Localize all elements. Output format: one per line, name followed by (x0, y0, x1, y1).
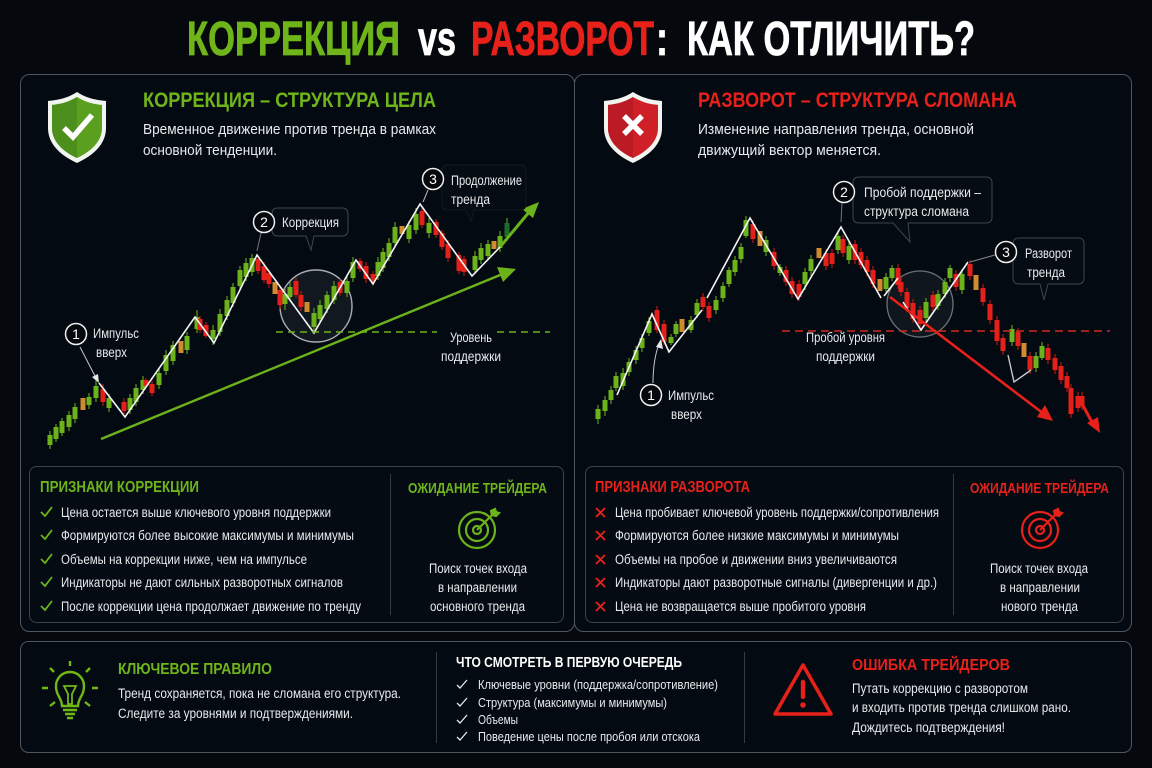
text: what to watch first (456, 655, 718, 744)
icon: red target (1022, 509, 1062, 548)
callout 3: trend continuation: Продолжение (451, 173, 522, 188)
list: correction signs: Формируются более высокие максимумы и минимумы (61, 528, 354, 543)
callout 2: support breakout (834, 177, 992, 242)
box: reversal signs (586, 466, 1124, 622)
callout 1: impulse (66, 324, 139, 383)
chart: trend reversal (598, 177, 1110, 433)
candlesticks (598, 216, 1082, 424)
title: КОРРЕКЦИЯ (187, 13, 400, 66)
text: traders' mistake: Путать коррекцию с разворотом (852, 681, 1028, 696)
callout 2: correction: 2 (260, 214, 268, 230)
list: correction signs (61, 505, 361, 614)
title: vs (418, 13, 456, 66)
text: key rule: Следите за уровнями и подтверждениями. (118, 706, 353, 721)
callout 3: trend reversal: Разворот (1025, 246, 1072, 261)
callout 3: trend reversal (970, 238, 1084, 300)
callout 2: support breakout: 2 (840, 184, 848, 200)
text: trader expectation: Поиск точек входа (990, 561, 1088, 576)
highlight circle (280, 270, 352, 342)
text: what to watch first: Ключевые уровни (поддержка/сопротивление) (478, 678, 718, 692)
heading: trader expectation: ОЖИДАНИЕ ТРЕЙДЕРА (970, 479, 1109, 497)
callout 3: trend reversal: тренда (1027, 265, 1065, 280)
support level dashed line (276, 331, 550, 333)
breakdown label: поддержки (816, 349, 875, 364)
description: correction: основной тенденции. (143, 142, 277, 159)
text: what to watch first: ЧТО СМОТРЕТЬ В ПЕРВУЮ ОЧЕРЕДЬ (456, 655, 682, 671)
arrow: rising trendline (101, 267, 516, 439)
icon: warning triangle (775, 665, 831, 714)
callout 3: trend continuation: тренда (451, 192, 490, 207)
description: correction: Временное движение против тренда в рамках (143, 121, 436, 138)
text: trader expectation (429, 561, 527, 614)
highlight circle (887, 271, 953, 337)
white structure zigzag (99, 204, 502, 417)
title (187, 13, 975, 66)
box: correction signs (30, 466, 564, 622)
chart: uptrend with correction (50, 165, 550, 449)
list cross icons (596, 508, 605, 611)
text: trader expectation: в направлении (438, 580, 517, 595)
callout 1: impulse: 1 (72, 326, 80, 342)
callout 2: support breakout: Пробой поддержки – (864, 185, 981, 200)
callout 1: impulse: Импульс (668, 388, 714, 403)
icon: green target (459, 509, 499, 548)
description: reversal: Изменение направления тренда, основной (698, 121, 974, 138)
list: reversal signs: Цена пробивает ключевой уровень поддержки/сопротивления (615, 505, 939, 520)
text: what to watch first: Структура (максимумы и минимумы) (478, 696, 667, 710)
callout 1: impulse: вверх (671, 407, 702, 422)
candlesticks (50, 208, 507, 449)
description: reversal (698, 121, 974, 159)
text: key rule: Тренд сохраняется, пока не сломана его структура. (118, 686, 401, 701)
icon: light bulb (42, 661, 98, 718)
panel: reversal (574, 74, 1132, 632)
callout 3: trend reversal: 3 (1002, 244, 1010, 260)
text: trader expectation: основного тренда (430, 599, 525, 614)
title: КАК ОТЛИЧИТЬ? (687, 13, 975, 66)
heading: correction: КОРРЕКЦИЯ – СТРУКТУРА ЦЕЛА (143, 89, 436, 112)
arrow: breakdown down (890, 297, 1053, 421)
support level label (441, 330, 501, 364)
panel: bottom summary (20, 642, 1132, 752)
description: reversal: движущий вектор меняется. (698, 142, 881, 159)
callout 2: support breakout: структура сломана (864, 204, 969, 219)
text: key rule: КЛЮЧЕВОЕ ПРАВИЛО (118, 661, 272, 678)
text: traders' mistake: Дождитесь подтверждения! (852, 720, 1005, 735)
callout 2: correction (254, 208, 348, 251)
breakdown label (806, 330, 885, 364)
breakdown label: Пробой уровня (806, 330, 885, 345)
icon: red shield with cross (604, 92, 662, 163)
title: : (656, 13, 668, 66)
heading: correction signs: ПРИЗНАКИ КОРРЕКЦИИ (40, 479, 199, 496)
list: correction signs: Цена остается выше ключевого уровня поддержки (61, 505, 331, 520)
text: what to watch first: Поведение цены после пробоя или отскока (478, 730, 700, 744)
list: reversal signs: Индикаторы дают разворотные сигналы (дивергенции и др.) (615, 575, 937, 590)
callout 3: trend continuation (422, 165, 526, 221)
title: РАЗВОРОТ (471, 13, 654, 66)
text: trader expectation: в направлении (1000, 580, 1080, 595)
icon: green shield with check (48, 92, 106, 163)
callout 1: impulse (640, 339, 714, 422)
heading: reversal signs: ПРИЗНАКИ РАЗВОРОТА (595, 479, 750, 496)
description: correction (143, 121, 436, 159)
list: reversal signs: Формируются более низкие максимумы и минимумы (615, 528, 899, 543)
text: trader expectation: нового тренда (1001, 599, 1078, 614)
text: key rule (118, 661, 401, 721)
list: reversal signs (615, 505, 939, 614)
list check icons (41, 507, 52, 610)
white structure zigzag (617, 218, 1031, 395)
arrow: final drop (1080, 400, 1100, 433)
support breakdown dashed line (782, 330, 1110, 332)
text: what to watch first: Объемы (478, 713, 518, 727)
list: reversal signs: Объемы на пробое и движении вниз увеличиваются (615, 552, 897, 567)
heading: trader expectation: ОЖИДАНИЕ ТРЕЙДЕРА (408, 479, 547, 497)
list: reversal signs: Цена не возвращается выше пробитого уровня (615, 599, 866, 614)
callout 2: correction: Коррекция (282, 215, 339, 230)
text: traders' mistake: ОШИБКА ТРЕЙДЕРОВ (852, 655, 1010, 674)
support level label: Уровень (450, 330, 492, 345)
text: traders' mistake (852, 655, 1071, 735)
callout 1: impulse: Импульс (93, 326, 139, 341)
text: trader expectation: Поиск точек входа (429, 561, 527, 576)
callout 1: impulse: вверх (96, 345, 127, 360)
arrow: trend continuation (500, 202, 539, 247)
heading: reversal: РАЗВОРОТ – СТРУКТУРА СЛОМАНА (698, 89, 1017, 112)
list: correction signs: Индикаторы не дают сильных разворотных сигналов (61, 575, 343, 590)
text: trader expectation (990, 561, 1088, 614)
support level label: поддержки (441, 349, 501, 364)
panel: correction (20, 74, 574, 632)
list: correction signs: После коррекции цена продолжает движение по тренду (61, 599, 361, 614)
callout 1: impulse: 1 (647, 387, 655, 403)
callout 3: trend continuation: 3 (429, 171, 437, 187)
list: correction signs: Объемы на коррекции ниже, чем на импульсе (61, 552, 307, 567)
text: traders' mistake: и входить против тренда слишком рано. (852, 700, 1071, 715)
